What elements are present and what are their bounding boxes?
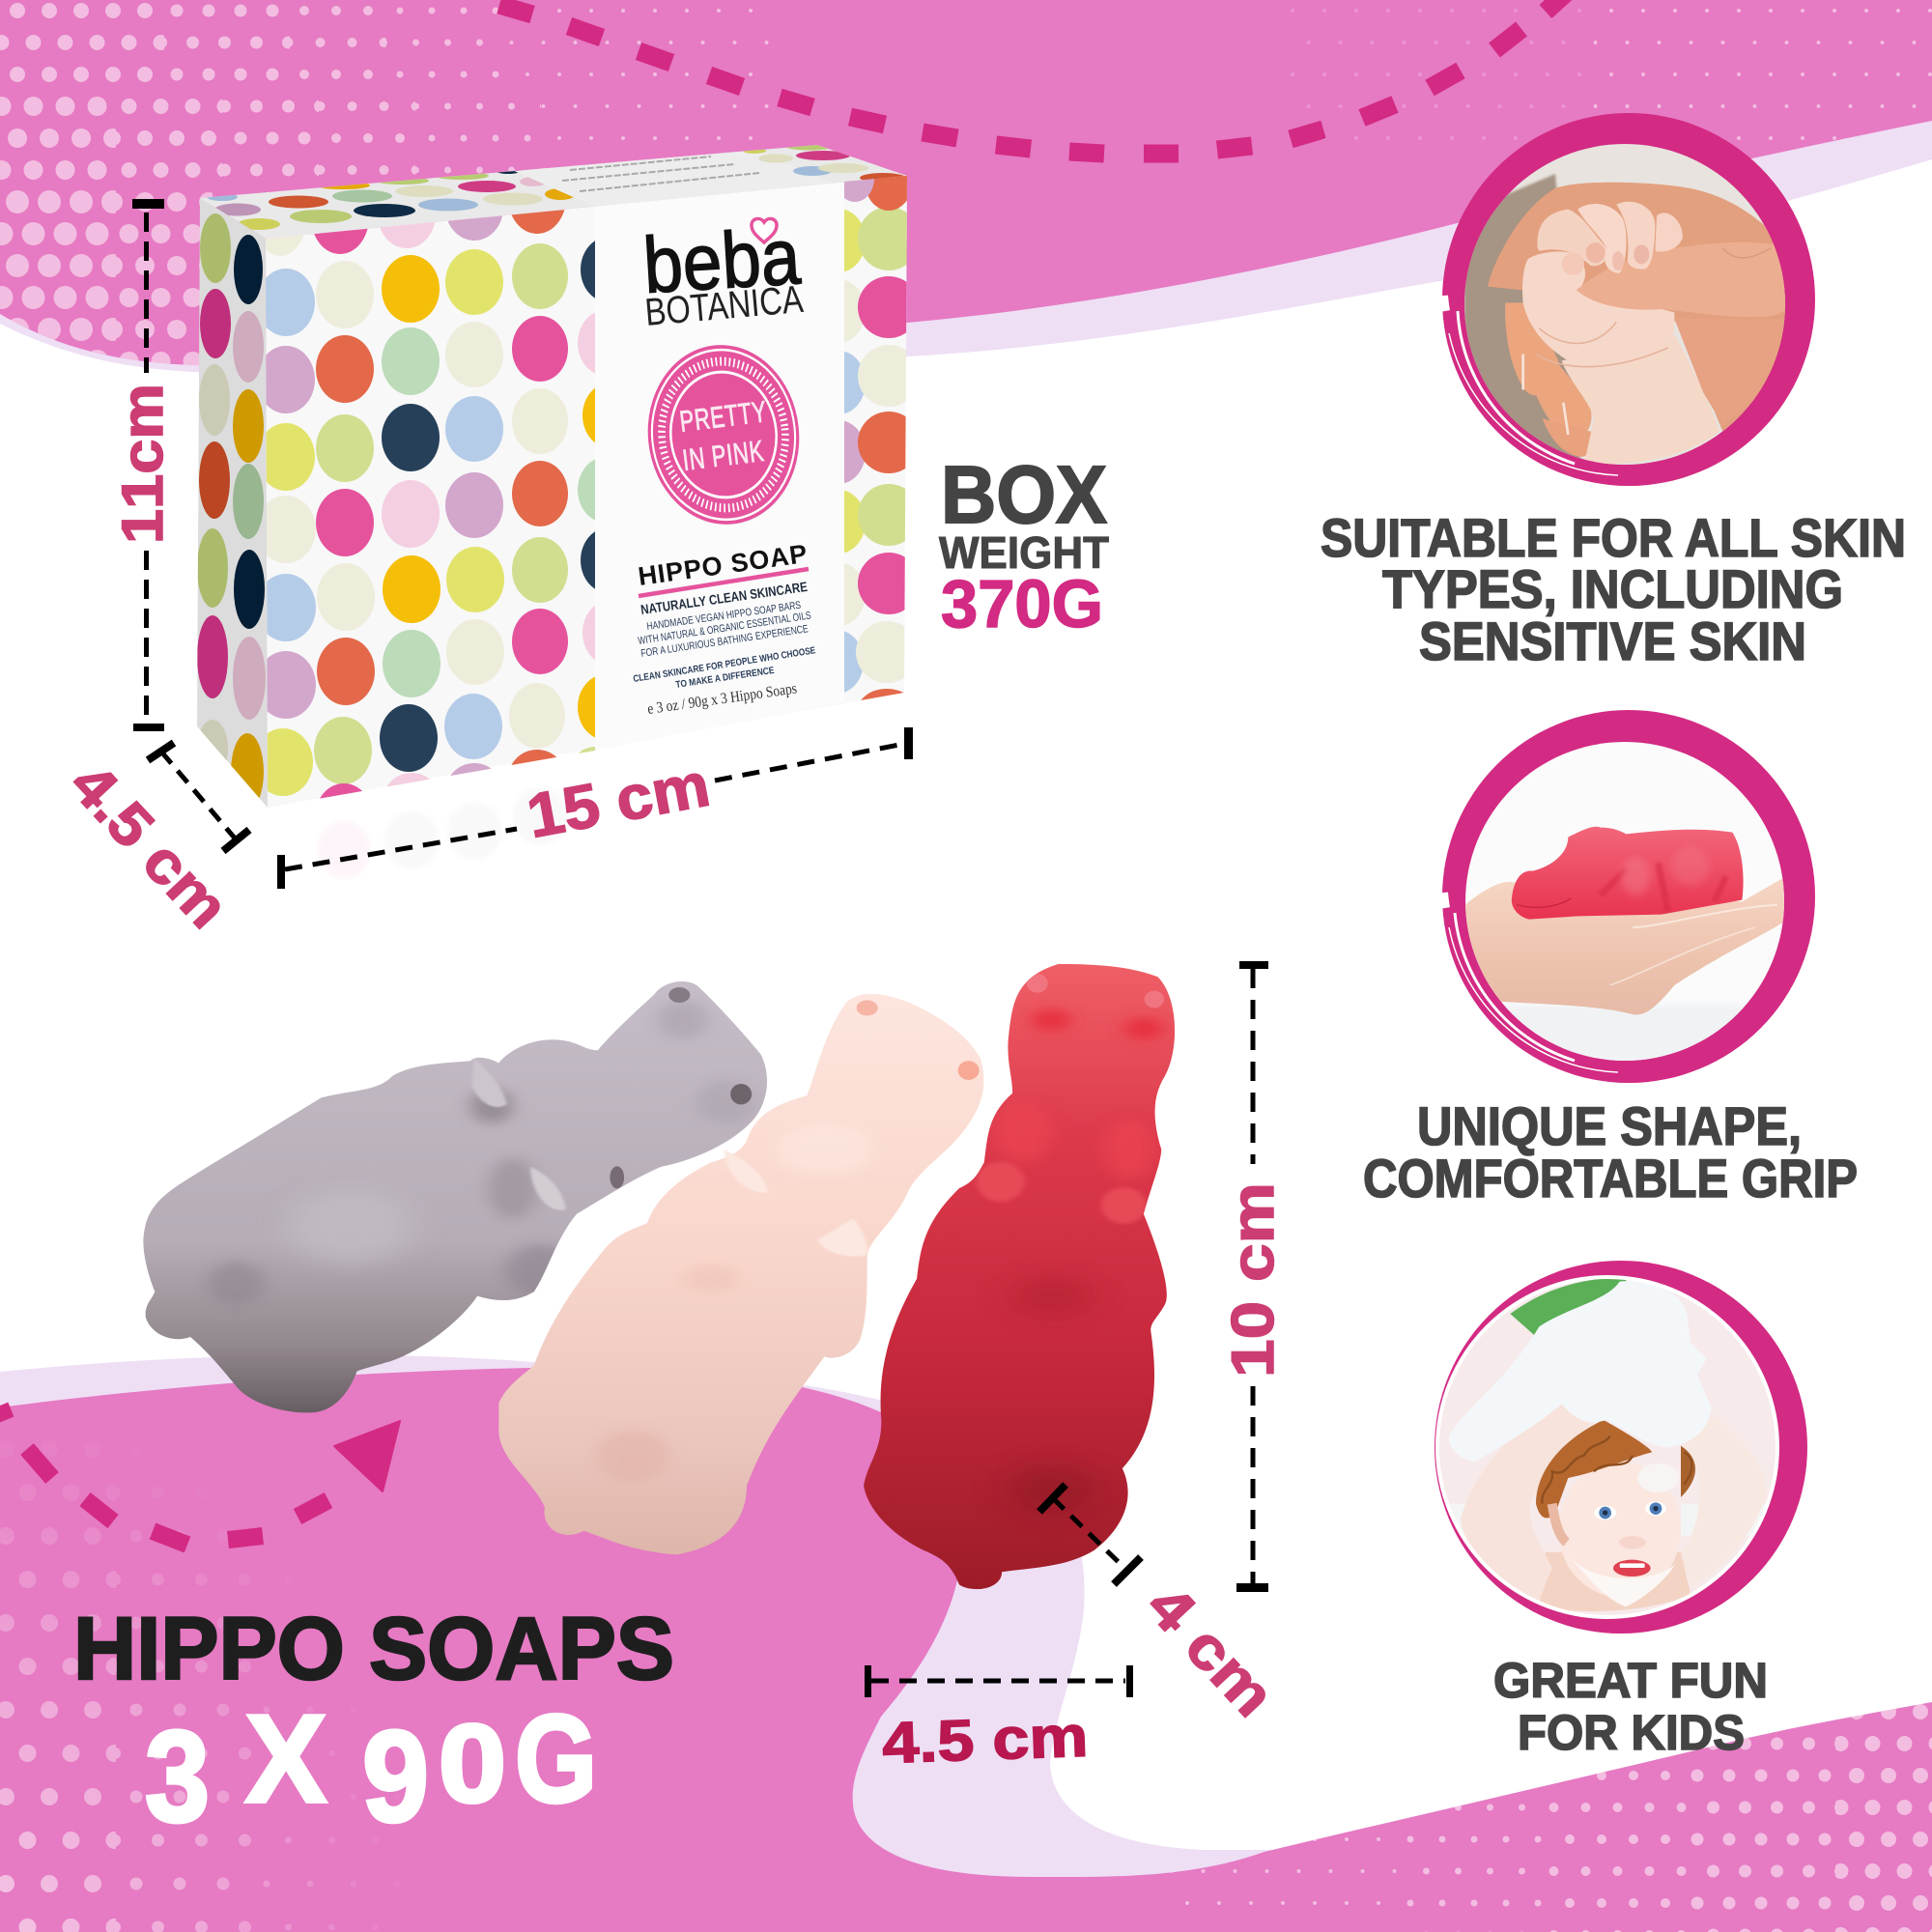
- box front face with polka dots: [266, 176, 907, 799]
- top dashed curved line: [499, 0, 1567, 154]
- arrow: bottom dashed arrow: [0, 1406, 400, 1545]
- bottom background wave: [0, 1355, 1932, 1932]
- circle photo: baby hand: [1442, 113, 1815, 486]
- dimension: 4.5 cm soap width: [865, 1665, 1133, 1776]
- text: great fun for kids: FOR KIDS: [1518, 1705, 1745, 1760]
- label text block: WITH NATURAL & ORGANIC ESSENTIAL OILS: [638, 610, 811, 647]
- label text block: e 3 oz / 90g x 3 Hippo Soaps: [646, 680, 798, 718]
- dimension: 4 cm soap depth: 4 cm: [1134, 1573, 1287, 1729]
- text: suitable for all skin types: TYPES, INCLUDING: [1382, 558, 1843, 619]
- box reflection: [317, 787, 567, 879]
- hippo soaps: [116, 959, 1186, 1594]
- label text block: TO MAKE A DIFFERENCE: [675, 666, 776, 691]
- brush texture strokes: [1443, 893, 1618, 1072]
- dimension: 15 cm box width: 15 cm: [522, 750, 715, 851]
- box top face: [200, 143, 907, 239]
- label text block: [633, 539, 816, 718]
- badge: pretty in pink: PRETTY: [678, 395, 768, 439]
- text: unique shape comfortable grip: [1363, 1095, 1858, 1208]
- box weight text: [939, 449, 1109, 641]
- heading: hippo soaps: HIPPO SOAPS: [73, 1600, 674, 1698]
- product box: [197, 143, 920, 851]
- text: unique shape comfortable grip: COMFORTABLE GRIP: [1363, 1148, 1858, 1208]
- circle photo: child with foam: [1435, 1261, 1807, 1634]
- top background wave: [0, 0, 1932, 379]
- box weight text: 370G: [941, 566, 1103, 641]
- label text block: CLEAN SKINCARE FOR PEOPLE WHO CHOOSE: [633, 645, 816, 685]
- brush texture strokes: [1443, 296, 1618, 475]
- logo: beba botanica: BOTANICA: [643, 278, 805, 334]
- label text block: HANDMADE VEGAN HIPPO SOAP BARS: [646, 600, 802, 633]
- box weight text: WEIGHT: [939, 527, 1109, 578]
- heading: 3 x 90g: 9: [362, 1705, 429, 1849]
- dimension: 4 cm soap depth: [1039, 1485, 1287, 1729]
- dimension: 11cm box height: [110, 199, 175, 731]
- text: unique shape comfortable grip: UNIQUE SHAPE,: [1417, 1095, 1802, 1156]
- dimension: 4.5 cm soap width: 4.5 cm: [881, 1704, 1089, 1776]
- circle photo: soap in hand: [1442, 710, 1815, 1083]
- box white label panel: [595, 183, 844, 751]
- label text block: HIPPO SOAP: [637, 539, 809, 591]
- text: suitable for all skin types: SENSITIVE SKIN: [1419, 611, 1806, 671]
- badge: pretty in pink: [639, 337, 808, 532]
- box weight text: BOX: [941, 449, 1107, 540]
- grey hippo soap: [143, 981, 767, 1412]
- dimension: 11cm box height: 11cm: [110, 384, 175, 544]
- dimension: 10 cm soap height: 10 cm: [1220, 1182, 1287, 1378]
- dimension: 4.5 cm box depth: 4.5 cm: [57, 751, 242, 941]
- heading: 3 x 90g: X: [245, 1690, 327, 1829]
- label text block: NATURALLY CLEAN SKINCARE: [639, 579, 809, 617]
- text: great fun for kids: GREAT FUN: [1493, 1653, 1768, 1708]
- red hippo soap: [853, 959, 1186, 1594]
- label text block: FOR A LUXURIOUS BATHING EXPERIENCE: [640, 623, 810, 660]
- dimension: 10 cm soap height: [1220, 961, 1287, 1592]
- badge: pretty in pink: IN PINK: [681, 434, 765, 477]
- icon: heart on logo: [752, 218, 777, 242]
- heading: 3 x 90g: G: [515, 1690, 597, 1829]
- pink hippo soap: [485, 985, 1002, 1563]
- box side face: [197, 198, 268, 810]
- logo: beba botanica: beba: [641, 213, 803, 310]
- heading: 3 x 90g: 3: [145, 1705, 210, 1849]
- heading: 3 x 90g: [145, 1690, 597, 1849]
- text: great fun for kids: [1493, 1653, 1768, 1760]
- text: suitable for all skin types: [1321, 507, 1906, 671]
- heading: 3 x 90g: 0: [439, 1703, 506, 1826]
- dimension: 15 cm box width: [277, 727, 913, 889]
